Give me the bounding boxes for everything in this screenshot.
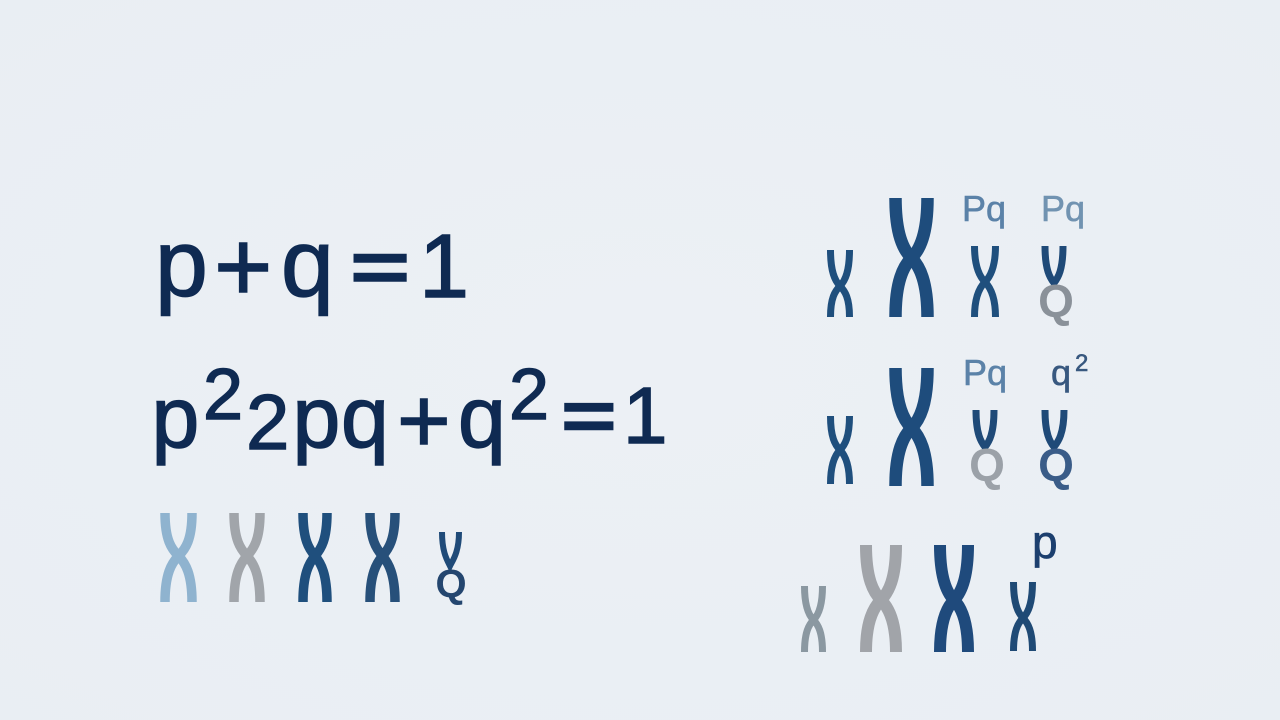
equation: genotype frequencies: 2 [246, 378, 289, 466]
chromosome grid: row 2 [830, 350, 1088, 491]
chromosome grid: row 3 [804, 516, 1058, 652]
label: second Pq: Pq [1041, 188, 1085, 229]
chromosome: medium [974, 246, 996, 317]
chromosome: arms with grey Q: Q [969, 439, 1005, 491]
chromosome: large grey [866, 545, 896, 652]
chromosome: large [896, 368, 928, 486]
equation: allele frequencies: p [155, 211, 208, 317]
chromosome grid: row 1 [830, 188, 1085, 327]
chromosome: small dark [1014, 582, 1032, 651]
chromosome: arms with dark Q: Q [1038, 439, 1074, 491]
label: p: p [1032, 516, 1058, 568]
chromosome: navy [370, 513, 395, 602]
chromosome: arms with grey Q [969, 410, 1005, 491]
equation: allele frequencies: 1 [419, 217, 469, 317]
chromosome: small with Q: Q [435, 562, 467, 606]
label: q squared: 2 [1075, 350, 1088, 377]
chromosome: arms with grey Q [1038, 246, 1074, 327]
chromosome: light blue [165, 513, 192, 602]
equation: genotype frequencies: 1 [623, 371, 668, 460]
chromosome: large [896, 198, 928, 317]
equation: genotype frequencies: pq [292, 370, 389, 466]
chromosome: arms with dark Q [1038, 410, 1074, 491]
equation: allele frequencies: = [351, 224, 409, 309]
equation: genotype frequencies: 2 [509, 355, 549, 435]
label: Pq: Pq [962, 188, 1006, 229]
equation: genotype frequencies: 2 [203, 355, 243, 435]
equation: genotype frequencies: q [458, 370, 506, 466]
chromosome: dark blue [303, 513, 327, 602]
chromosome: arms with grey Q: Q [1038, 275, 1074, 327]
chromosome: small with Q [435, 532, 467, 606]
equation: genotype frequencies [152, 355, 668, 472]
equation: genotype frequencies: + [397, 370, 451, 472]
chromosome: grey [234, 513, 260, 602]
chromosome: small [830, 250, 850, 317]
chromosome: small grey [804, 586, 822, 652]
equation: allele frequencies: q [281, 211, 334, 317]
equation: allele frequencies [155, 211, 469, 323]
chromosome: small [830, 416, 850, 484]
equation: genotype frequencies: p [152, 370, 199, 466]
label: Pq: Pq [963, 352, 1007, 393]
label: q squared [1051, 350, 1088, 393]
label: q squared: q [1051, 352, 1071, 393]
chromosome row: left [165, 513, 467, 606]
chromosome: large dark [940, 545, 968, 652]
equation: allele frequencies: + [214, 211, 272, 323]
equation: genotype frequencies: = [562, 375, 616, 457]
